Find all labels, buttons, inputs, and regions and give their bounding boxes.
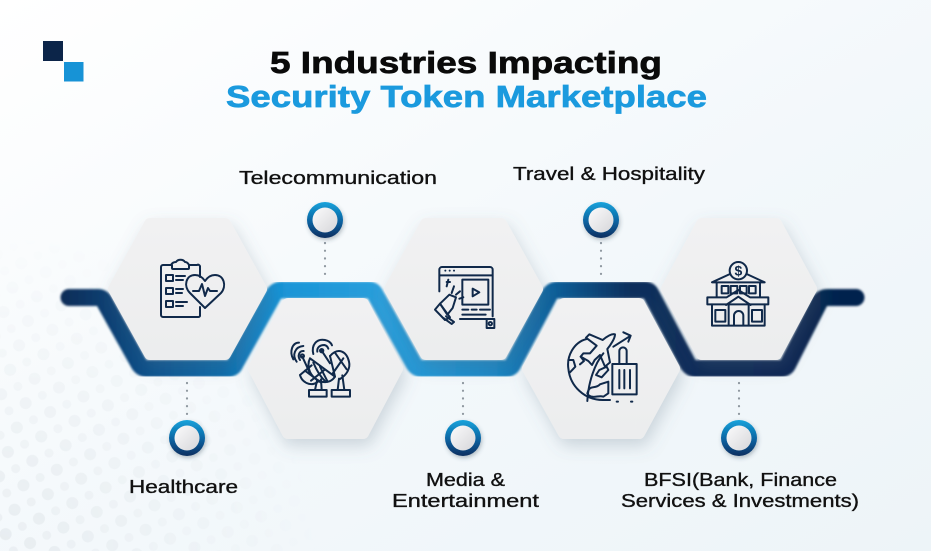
icon: satellite dishes bbox=[291, 340, 350, 397]
label: BFSI: BFSI(Bank, Finance bbox=[644, 469, 837, 490]
hexagon 1 bbox=[114, 224, 261, 354]
icon: bank building with dollar sign: $ bbox=[734, 263, 742, 279]
connector: winding timeline band bbox=[69, 290, 856, 368]
marker: media bbox=[445, 420, 481, 456]
title bbox=[226, 45, 707, 114]
label: Telecommunication: Telecommunication bbox=[239, 167, 437, 188]
connector dots: healthcare bbox=[186, 383, 188, 416]
label: BFSI: Services & Investments) bbox=[621, 490, 859, 511]
marker: BFSI bbox=[721, 420, 757, 456]
hexagon 2 bbox=[254, 304, 397, 433]
label: BFSI bbox=[621, 469, 859, 511]
label: Media & Entertainment: Entertainment bbox=[392, 490, 539, 511]
title: 5 Industries Impacting bbox=[270, 45, 662, 80]
icon: media browser and megaphone bbox=[435, 267, 494, 328]
hexagon 4 bbox=[528, 304, 674, 433]
label: Travel & Hospitality: Travel & Hospitality bbox=[513, 163, 706, 184]
connector dots: telecommunication bbox=[324, 243, 326, 276]
connector dots: travel bbox=[600, 243, 602, 276]
icon: bank building with dollar sign bbox=[707, 262, 768, 326]
connector dots: BFSI bbox=[738, 383, 740, 416]
label: Media & Entertainment: Media & bbox=[426, 469, 506, 490]
logo mark bbox=[43, 41, 84, 82]
label: Media & Entertainment bbox=[392, 469, 539, 511]
marker: healthcare bbox=[169, 420, 205, 456]
icon: globe, plane and suitcase bbox=[568, 332, 637, 402]
background bbox=[0, 389, 931, 551]
label: Healthcare: Healthcare bbox=[129, 476, 238, 497]
title: Security Token Marketplace bbox=[226, 79, 707, 114]
hexagon 5 bbox=[667, 224, 811, 354]
marker: travel bbox=[583, 202, 619, 238]
icon: healthcare clipboard and heart bbox=[161, 260, 224, 317]
marker: telecommunication bbox=[307, 202, 343, 238]
hexagon 3 bbox=[390, 224, 537, 354]
connector dots: media bbox=[462, 383, 464, 416]
